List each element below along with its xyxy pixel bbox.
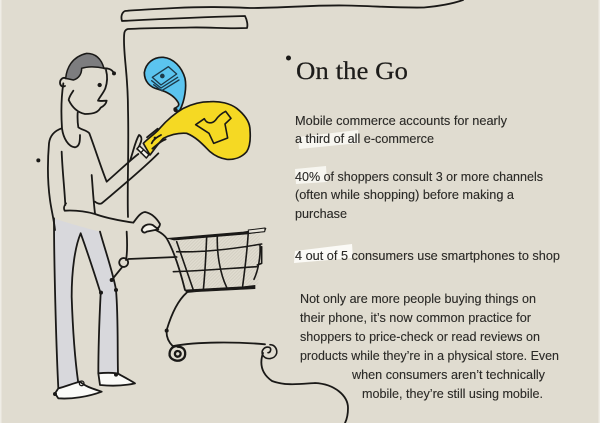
- hand on handle: [142, 224, 158, 233]
- person: torso, arms, head: [36, 53, 160, 230]
- body paragraph: their phone, it’s now common practice for: [300, 311, 531, 325]
- stat: 40% of shoppers: [295, 166, 543, 221]
- stat: mobile commerce share: a third of all e-commerce: [295, 132, 434, 146]
- body paragraph: when consumers aren’t technically: [351, 368, 546, 382]
- hair: [66, 53, 104, 80]
- stat: 40% of shoppers: 40% of shoppers consult 3 or more channels: [295, 170, 543, 184]
- phone: [137, 146, 149, 158]
- basket mesh: [170, 231, 260, 290]
- stat: mobile commerce share: [295, 114, 508, 149]
- person: legs and shoes: [53, 218, 135, 399]
- icon: yellow speech drop with t-shirt: [137, 102, 250, 159]
- body paragraph: [300, 292, 559, 401]
- title: On the Go: [296, 58, 408, 85]
- body paragraph: shoppers to price-check or read reviews on: [300, 330, 540, 344]
- body paragraph: Not only are more people buying things on: [300, 292, 536, 306]
- body paragraph: mobile, they’re still using mobile.: [362, 387, 543, 401]
- head: [60, 68, 114, 114]
- shoes: [55, 382, 102, 399]
- trousers: [54, 218, 118, 388]
- neck collar: [61, 83, 80, 147]
- loose line from rear wheel: [261, 353, 348, 423]
- torso and arms: [48, 113, 160, 230]
- cart frame and wheels: [167, 293, 265, 346]
- shopping cart: [110, 224, 277, 361]
- stat: 40% of shoppers: (often while shopping) before making a: [295, 188, 514, 202]
- icon: blue speech drop with cash: [144, 57, 186, 112]
- thumb and fingers: [130, 135, 141, 161]
- stat: 4 out of 5 consumers: 4 out of 5 consumers use smartphones to shop: [295, 249, 560, 263]
- stat: 40% of shoppers: purchase: [295, 207, 347, 221]
- stat: mobile commerce share: Mobile commerce accounts for nearly: [295, 114, 508, 128]
- decorative dot beside title: [286, 56, 291, 60]
- body paragraph: products while they’re in a physical store. Even: [300, 349, 559, 363]
- continuous line: pole and top ribbon: [121, 0, 463, 217]
